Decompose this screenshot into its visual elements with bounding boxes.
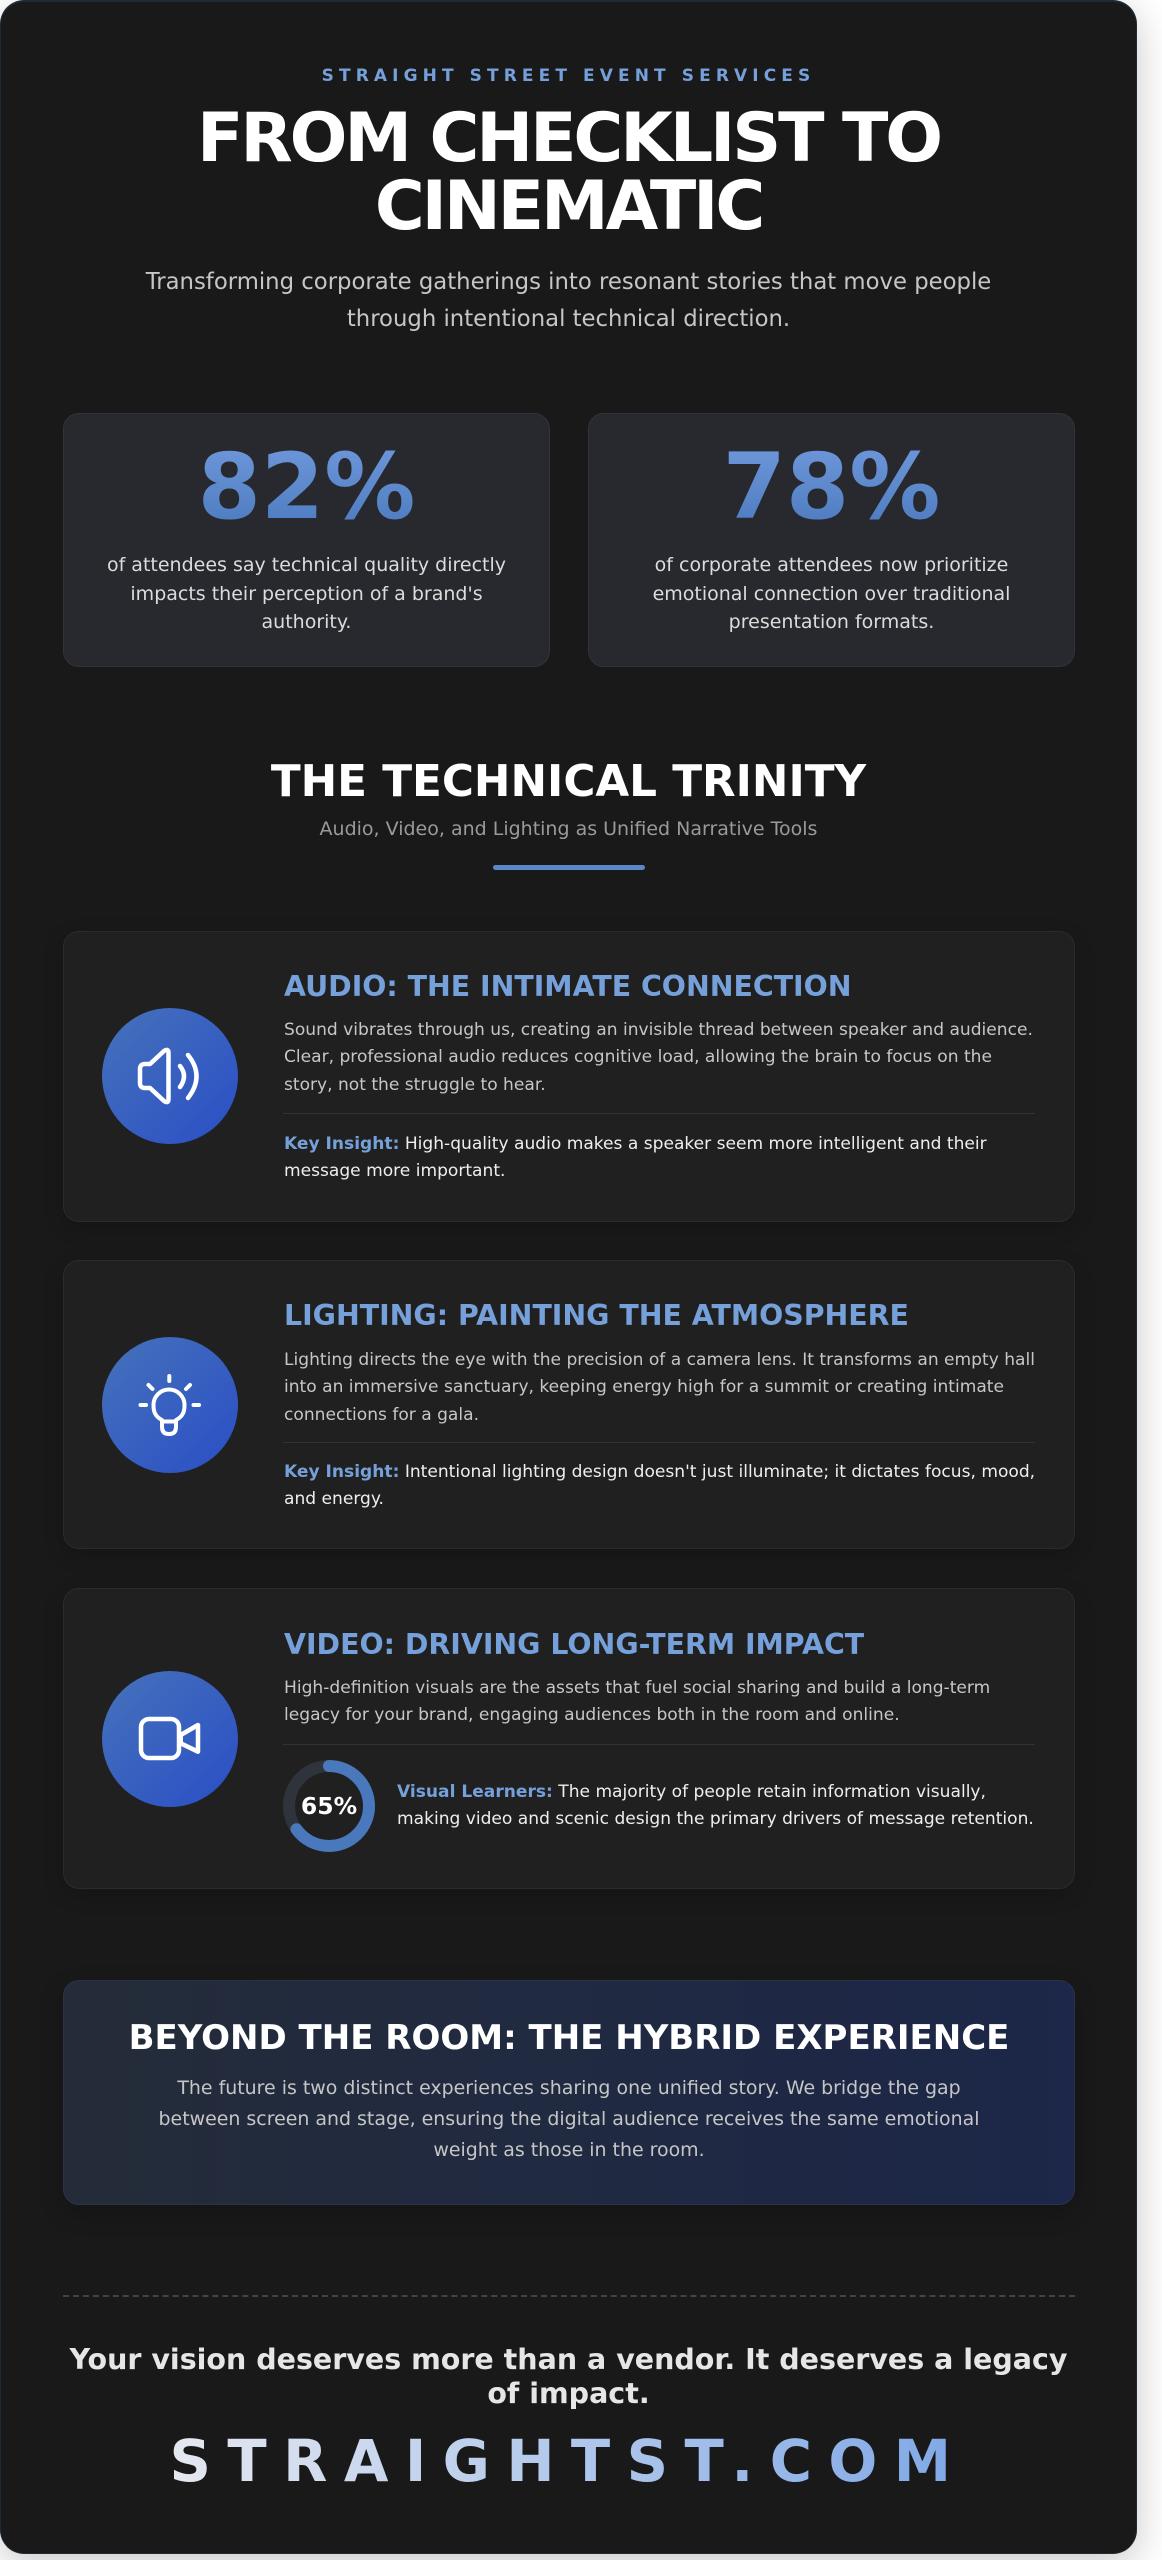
title: CINEMATIC: [375, 167, 762, 246]
hybrid body: The future is two distinct experiences sharing one unified story. We bridge the gap: [177, 2077, 961, 2099]
stat card: 82%: [63, 413, 550, 667]
stat number 82%: [63, 438, 550, 538]
lighting body: Lighting directs the eye with the precision of a camera lens. It transforms an empty hall: [284, 1350, 1035, 1370]
lighting key insight: Key Insight: Intentional lighting design doesn't just illuminate; it dictates focus, mood,: [284, 1462, 1035, 1482]
stat text 78%: of corporate attendees now prioritize: [655, 554, 1008, 576]
donut chart: 65%: 65%: [301, 1792, 357, 1820]
section heading: THE TECHNICAL TRINITY: [271, 756, 866, 807]
hybrid heading: BEYOND THE ROOM: THE HYBRID EXPERIENCE: [129, 2018, 1009, 2058]
footer dashed divider: [63, 2295, 1075, 2297]
title: [197, 99, 940, 246]
stat text 78%: presentation formats.: [729, 611, 934, 633]
audio body: Clear, professional audio reduces cognitive load, allowing the brain to focus on the: [284, 1047, 992, 1067]
stat text 78%: [653, 554, 1010, 633]
subtitle: Transforming corporate gatherings into resonant stories that move people: [146, 268, 991, 294]
footer tagline: Your vision deserves more than a vendor. It deserves a legacy: [69, 2343, 1068, 2376]
audio divider: [283, 1113, 1035, 1114]
stat text 82%: [107, 554, 506, 633]
audio key insight: Key Insight: High-quality audio makes a speaker seem more intelligent and their: [284, 1134, 987, 1154]
video divider: [283, 1744, 1035, 1745]
footer tagline: [69, 2343, 1068, 2410]
section subheading: Audio, Video, and Lighting as Unified Narrative Tools: [320, 818, 817, 840]
subtitle: through intentional technical direction.: [347, 306, 790, 332]
icon: video camera: [102, 1671, 238, 1807]
stat text 82%: of attendees say technical quality directly: [107, 554, 506, 576]
stat text 82%: impacts their perception of a brand's: [130, 582, 483, 604]
footer tagline: of impact.: [487, 2376, 650, 2410]
footer url: STRAIGHTST.COM: [170, 2428, 967, 2495]
hybrid body: between screen and stage, ensuring the digital audience receives the same emotional: [159, 2108, 979, 2130]
audio heading: AUDIO: THE INTIMATE CONNECTION: [284, 970, 852, 1003]
title: FROM CHECKLIST TO: [197, 99, 940, 178]
lighting key insight: and energy.: [284, 1489, 384, 1509]
icon: light bulb: [102, 1337, 238, 1473]
audio key insight: [284, 1134, 987, 1181]
lighting body: [284, 1350, 1035, 1425]
video body: [284, 1678, 990, 1725]
video heading: VIDEO: DRIVING LONG-TERM IMPACT: [284, 1628, 864, 1660]
audio body: story, not the struggle to hear.: [284, 1075, 546, 1095]
donut chart: 65%: [283, 1760, 375, 1852]
panel: hybrid experience: [63, 1980, 1075, 2205]
stat number 78%: 78%: [723, 435, 940, 540]
visual learners text: Visual Learners: The majority of people retain information visually,: [397, 1782, 986, 1802]
icon: speaker: [102, 1008, 238, 1144]
lighting key insight: [284, 1462, 1035, 1509]
stat number 82%: 82%: [198, 435, 415, 540]
video body: legacy for your brand, engaging audiences both in the room and online.: [284, 1705, 900, 1725]
eyebrow: STRAIGHT STREET EVENT SERVICES: [322, 66, 815, 86]
stat text 82%: authority.: [262, 611, 351, 633]
lighting divider: [283, 1442, 1035, 1443]
visual learners text: [397, 1782, 1034, 1828]
lighting body: connections for a gala.: [284, 1405, 479, 1425]
hybrid body: [159, 2077, 979, 2161]
lighting heading: LIGHTING: PAINTING THE ATMOSPHERE: [284, 1298, 909, 1332]
lighting body: into an immersive sanctuary, keeping energy high for a summit or creating intimate: [284, 1377, 1004, 1397]
panel: video: [63, 1588, 1075, 1889]
visual learners text: making video and scenic design the primary drivers of message retention.: [397, 1808, 1034, 1828]
subtitle: [146, 268, 991, 332]
hybrid body: weight as those in the room.: [433, 2139, 705, 2161]
panel: audio: [63, 931, 1075, 1222]
stat text 78%: emotional connection over traditional: [653, 582, 1010, 604]
stat number 78%: [588, 438, 1075, 538]
panel: lighting: [63, 1260, 1075, 1549]
audio key insight: message more important.: [284, 1161, 505, 1181]
video body: High-definition visuals are the assets that fuel social sharing and build a long-term: [284, 1678, 990, 1698]
audio body: [284, 1020, 1033, 1095]
audio body: Sound vibrates through us, creating an invisible thread between speaker and audience.: [284, 1020, 1033, 1040]
section underline: [493, 865, 645, 870]
stat card: 78%: [588, 413, 1075, 667]
